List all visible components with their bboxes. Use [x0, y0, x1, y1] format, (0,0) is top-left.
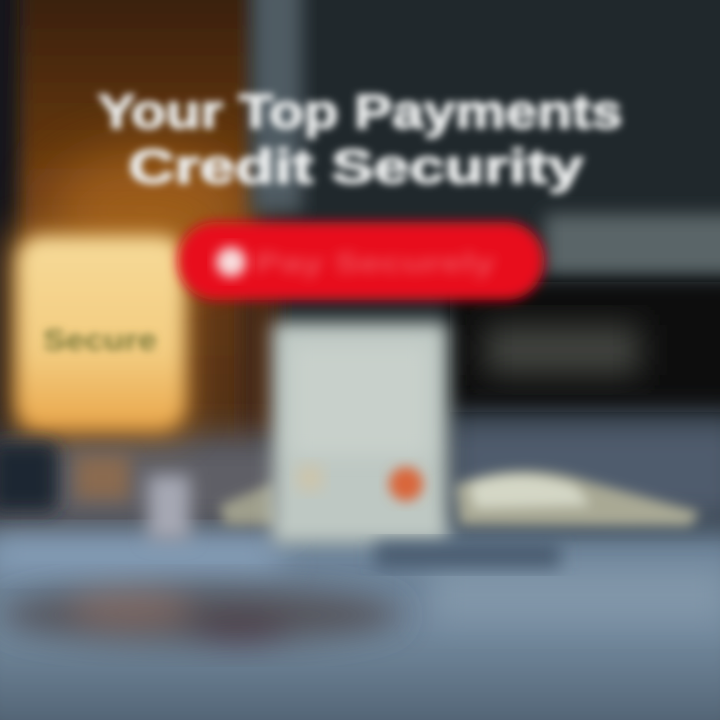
- background: grey shelf band: [545, 214, 720, 276]
- open book: [220, 471, 700, 526]
- lamp label: Secure: [43, 324, 157, 357]
- background: warm wood panel: [20, 0, 255, 450]
- table surface: [0, 418, 720, 720]
- lamp base: [75, 455, 190, 540]
- button label: Pay Securely: [255, 247, 496, 278]
- title line 1: Your Top Payments: [98, 86, 622, 139]
- dark object on table: [0, 442, 58, 512]
- title line 2: Credit Security: [128, 141, 584, 194]
- table reflection: [0, 587, 400, 644]
- button icon: [216, 247, 246, 277]
- background: dark recess: [240, 282, 720, 440]
- shadow below card: [375, 542, 560, 568]
- wood glow: [45, 150, 255, 270]
- title: [98, 86, 622, 194]
- card logo: [389, 467, 423, 501]
- lamp: [0, 225, 195, 440]
- payment card: [272, 322, 448, 544]
- card highlight: [292, 345, 428, 455]
- background: grey post: [252, 0, 302, 212]
- red call-to-action button: [178, 222, 544, 300]
